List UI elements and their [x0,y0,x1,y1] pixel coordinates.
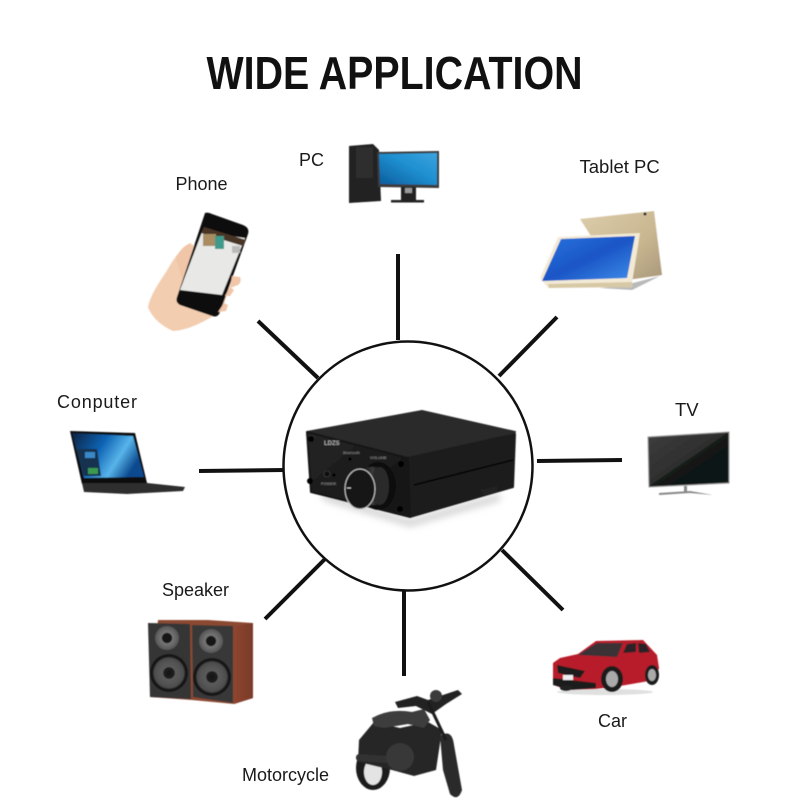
icon: phone in hand [148,213,248,331]
icon: TV [648,432,729,495]
icon: car [553,640,659,695]
icon: speakers [148,620,253,704]
icon: desktop PC [349,144,439,203]
icon: amplifier: POWER [321,481,336,486]
title: WIDE APPLICATION [206,47,582,99]
label: PC: PC [299,150,324,170]
central circle [284,342,532,590]
label: Phone: Phone [176,174,228,194]
icon: amplifier: VOLUME [370,455,387,460]
icon: amplifier: Bluetooth [343,450,360,455]
label: Computer: Conputer [57,392,137,412]
label: Speaker: Speaker [162,580,229,600]
icon: amplifier: LDZS [324,441,340,447]
icon: amplifier [307,411,515,526]
label: TV: TV [675,399,699,420]
label: Car: Car [598,711,627,731]
icon: tablet [540,211,662,290]
label: Tablet PC: Tablet PC [580,156,660,177]
connector lines [199,254,622,676]
icon: motorcycle [356,690,462,797]
icon: laptop [70,431,185,494]
label: Motorcycle: Motorcycle [242,765,329,785]
